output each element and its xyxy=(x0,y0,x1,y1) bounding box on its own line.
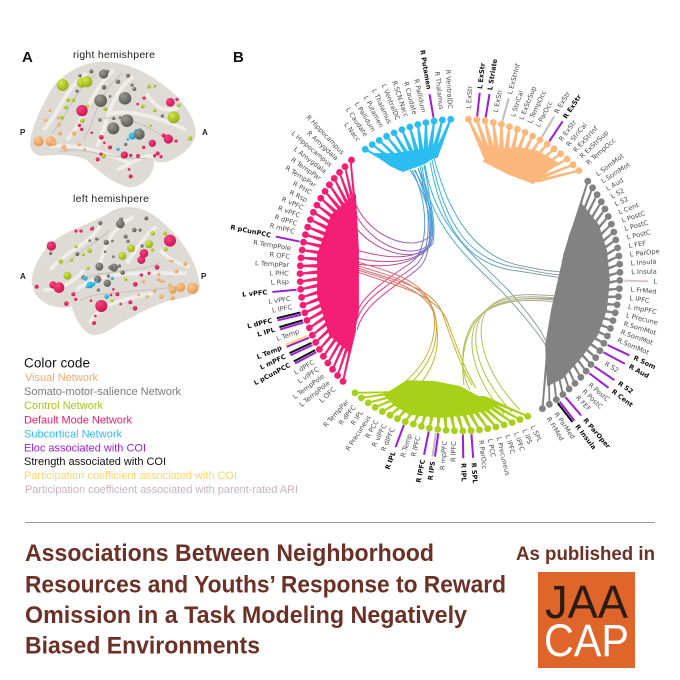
labels: subcortical network: L Caudate xyxy=(344,106,369,138)
labels: control network, right side of axis: L SPL xyxy=(529,424,544,444)
labels: somato-motor network: R FrMed xyxy=(545,416,566,442)
labels: default mode network: L Temp xyxy=(275,328,300,343)
labels: somato-motor network: R FEF xyxy=(574,394,593,413)
labels: control network, left side of axis: R dlPFC xyxy=(379,426,397,452)
labels: default mode network: R vPFC xyxy=(277,204,302,220)
labels: default mode network: L vPFC xyxy=(268,295,292,306)
subcortical network nodes xyxy=(362,116,454,153)
labels: somato-motor network: L SomMot xyxy=(600,160,632,185)
labels: somato-motor network: R Insula xyxy=(573,423,598,451)
labels: control network, left side of axis: R TempPar xyxy=(322,398,351,429)
labels: subcortical network: R Pallidum xyxy=(412,78,427,113)
labels: subcortical network: R.SCN.Nacc xyxy=(390,80,410,119)
labels: control network, right side of axis: R ParOcc xyxy=(477,440,489,470)
labels: control network, left side of axis: R IPL xyxy=(383,450,398,471)
labels: control network, left side of axis: R lPFC xyxy=(449,441,458,462)
labels: subcortical network: L Thalamus xyxy=(370,88,393,125)
visual network bundle xyxy=(465,116,582,183)
labels: somato-motor network: L PostC xyxy=(623,219,650,233)
legend: color code: Participation coefficient associated with parent-rated ARI xyxy=(25,484,298,496)
labels: default mode network: L IPL xyxy=(256,326,277,339)
labels: visual network: L ExStr xyxy=(465,85,474,109)
labels: subcortical network: R Putamen xyxy=(418,49,433,90)
labels: visual network: R ExStr xyxy=(557,118,578,143)
labels: default mode network: R Rsp xyxy=(288,189,309,204)
left hemisphere control nodes xyxy=(58,231,168,302)
labels: control network, left side of axis: R mpPFC xyxy=(438,440,449,470)
labels: somato-motor network: L lPFC xyxy=(629,294,651,305)
panel A heading: left hemisphere: left hemishpere xyxy=(73,193,149,205)
labels: control network, left side of axis: R PCC xyxy=(364,418,381,440)
legend: color code: Visual Network xyxy=(25,372,98,384)
labels: default mode network: R PHC xyxy=(291,180,313,197)
labels: somato-motor network: R S2 xyxy=(616,380,635,396)
labels: default mode network: R dPFC xyxy=(273,213,299,228)
labels: control network, right side of axis: L IPS xyxy=(520,428,534,445)
labels: visual network: R ExStr xyxy=(561,93,584,120)
right hemisphere somato-motor nodes xyxy=(75,69,164,146)
labels: control network, left side of axis: R IPS xyxy=(426,461,437,481)
labels: visual network: L ExStrSup xyxy=(518,85,538,121)
labels: somato-motor network: L mpPFC xyxy=(627,303,658,316)
labels: somato-motor network: L PostC xyxy=(621,209,647,225)
labels: visual network: R TempOcc xyxy=(585,136,618,167)
labels: default mode network: L lPFC xyxy=(271,303,293,315)
legend: color code: Participation coefficient associated with COI xyxy=(24,470,237,482)
labels: default mode network: L pCunPCC xyxy=(252,361,292,387)
links: subcortical to somato-motor xyxy=(422,158,566,348)
labels: subcortical network: R Thalamus xyxy=(433,71,445,111)
labels: somato-motor network: L Insula xyxy=(631,268,657,276)
brain: right hemisphere xyxy=(30,62,196,187)
orientation label A right hemisphere: A xyxy=(202,128,208,137)
labels: somato-motor network xyxy=(545,152,660,451)
labels: somato-motor network: L ParOpe xyxy=(629,247,660,259)
labels: control network, right side of axis: R SPL xyxy=(469,462,479,485)
legend: color code: Somato-motor-salience Network xyxy=(24,386,182,398)
divider rule xyxy=(25,522,655,523)
labels: somato-motor network: R Som xyxy=(632,354,657,371)
left hemisphere somato-motor nodes xyxy=(49,216,148,292)
published-in caption: As published in xyxy=(516,543,655,565)
labels: somato-motor network: L Insula xyxy=(630,258,657,267)
labels: default mode network: L TempPole xyxy=(291,373,326,401)
legend: color code: Eloc associated with COI xyxy=(24,442,146,454)
labels: visual network: L StriCal xyxy=(509,90,525,118)
subcortical network bundle xyxy=(362,116,454,171)
JAACAP journal logo: CAP xyxy=(544,615,629,666)
labels: control network, right side of axis xyxy=(459,424,544,485)
labels: default mode network: L OFC xyxy=(318,385,338,404)
labels: somato-motor network: R PostC xyxy=(587,381,611,404)
labels: subcortical network: R VentralDC xyxy=(444,70,454,109)
labels: somato-motor network: R S2 xyxy=(603,360,620,374)
labels: default mode network: L TempPole xyxy=(298,379,332,409)
labels: somato-motor network: L Precune xyxy=(625,311,659,327)
labels: default mode network: R vPFC xyxy=(280,195,305,212)
legend: color code: Default Mode Network xyxy=(24,414,132,426)
labels: somato-motor network: L FEF xyxy=(628,239,647,250)
labels: default mode network: L dPFC xyxy=(246,317,273,330)
article title xyxy=(25,540,506,660)
legend: color code xyxy=(24,356,298,496)
labels: somato-motor network: L PostC xyxy=(626,228,652,241)
panel label A: A xyxy=(22,49,33,66)
labels: default mode network: R OFC xyxy=(269,251,291,261)
default mode network nodes xyxy=(297,157,355,385)
legend: color code: Subcortical Network xyxy=(24,428,122,440)
labels: control network, right side of axis: L PCC xyxy=(486,438,497,458)
chord diagram: association bars and node labels xyxy=(230,49,660,485)
links: control to somato-motor xyxy=(463,295,558,414)
left hemisphere visual nodes xyxy=(137,259,198,300)
left hemisphere default mode nodes xyxy=(35,227,176,325)
labels: default mode network: R TempPar xyxy=(289,156,323,182)
labels: control network, left side of axis: R dPFC xyxy=(337,403,358,427)
labels: visual network xyxy=(465,58,618,167)
labels: somato-motor network: R Aud xyxy=(627,363,651,380)
labels: default mode network: R Amygdala xyxy=(305,129,340,162)
labels: somato-motor network: L Cent xyxy=(617,201,641,216)
orientation label P right hemisphere: P xyxy=(20,128,26,137)
somato-motor network bundle xyxy=(539,178,623,412)
right hemisphere default mode nodes xyxy=(76,96,179,178)
labels: control network, left side of axis: R lPFC xyxy=(415,459,427,483)
labels: subcortical network: R Caudate xyxy=(402,81,419,115)
links: default mode to subcortical xyxy=(356,165,434,330)
labels: visual network: L ExStrInf xyxy=(506,62,522,95)
article title: Associations Between Neighborhood xyxy=(25,540,434,567)
labels: control network, left side of axis: R Precuneus xyxy=(344,414,373,452)
labels: somato-motor network: R.SomMot xyxy=(616,336,651,357)
labels: control network, right side of axis: R IPL xyxy=(459,463,468,483)
labels: default mode network: L PHC xyxy=(269,269,289,277)
right hemisphere visual nodes xyxy=(34,109,86,152)
labels: subcortical network: L Pallidum xyxy=(353,101,377,133)
control network nodes xyxy=(352,389,531,434)
orientation label A left hemisphere: A xyxy=(20,272,26,281)
chord diagram: between-network links xyxy=(356,158,566,414)
links: default mode to control xyxy=(358,262,476,388)
labels: control network, left side of axis: R lPFC xyxy=(410,435,423,457)
labels: subcortical network xyxy=(342,49,454,143)
brain: left hemisphere xyxy=(32,207,200,335)
legend: color code: Strength associated with COI xyxy=(24,456,166,468)
labels: default mode network: L vlPFC xyxy=(296,365,321,385)
right hemisphere subcortical nodes xyxy=(116,128,141,151)
labels: control network, right side of axis: L lPFC xyxy=(512,431,526,453)
default mode network bundle xyxy=(297,157,358,385)
labels: somato-motor network: L xyxy=(653,278,658,286)
labels: default mode network: L mPFC xyxy=(259,353,287,372)
labels: visual network: R StriCal xyxy=(565,121,589,148)
labels: control network, left side of axis: R IPL xyxy=(349,409,365,427)
labels: default mode network: L dPFC xyxy=(292,358,316,377)
labels: somato-motor network: R PostC xyxy=(580,388,605,411)
labels: visual network: R ExStrInf xyxy=(572,124,600,154)
legend: color code: Control Network xyxy=(24,400,104,412)
labels: visual network: L TempOcc xyxy=(526,89,548,125)
labels: somato-motor network: R ParMed xyxy=(552,411,577,441)
right hemisphere control nodes xyxy=(57,76,192,158)
article title: Omission in a Task Modeling Negatively xyxy=(25,602,468,629)
labels: default mode network: L vPFC xyxy=(242,288,268,299)
labels: control network, right side of axis: L lPFC xyxy=(503,434,517,455)
labels: default mode network xyxy=(230,114,346,409)
labels: default mode network: R TempPar xyxy=(284,164,318,189)
labels: default mode network: R pCunPCC xyxy=(230,223,272,239)
labels: subcortical network: L VentralDC xyxy=(380,83,402,122)
labels: control network, left side of axis: R vlPFC xyxy=(370,423,389,448)
labels: somato-motor network: L Aud xyxy=(605,176,625,193)
labels: default mode network: L Temp xyxy=(256,344,283,361)
panel label B: B xyxy=(233,49,244,66)
labels: visual network: L ParOcc xyxy=(534,99,555,128)
left hemisphere subcortical nodes xyxy=(83,276,114,299)
labels: visual network: R ExStrSup xyxy=(578,129,610,160)
labels: somato-motor network: R.SomMot xyxy=(623,320,658,337)
labels: visual network: L ExStr xyxy=(476,62,487,89)
JAACAP journal logo xyxy=(538,572,635,668)
labels: somato-motor network: R ParOper xyxy=(581,417,613,451)
labels: control network, right side of axis: L Precuneus xyxy=(495,436,512,477)
labels: visual network: L ExStr xyxy=(492,89,505,113)
labels: default mode network: L Amygdala xyxy=(292,145,328,175)
labels: somato-motor network: L S2 xyxy=(613,195,630,208)
somato-motor network nodes xyxy=(539,178,623,412)
association bars xyxy=(272,93,648,458)
labels: somato-motor network: L S2 xyxy=(609,187,626,200)
orientation label P left hemisphere: P xyxy=(201,272,207,281)
labels: subcortical network: L Putamen xyxy=(362,95,385,129)
JAACAP journal logo: JAA xyxy=(545,576,628,628)
visual network nodes xyxy=(465,116,582,174)
control network bundle xyxy=(352,381,531,434)
labels: subcortical network: L Nacc xyxy=(342,121,362,143)
labels: default mode network: R TempPole xyxy=(252,239,292,252)
article title: Resources and Youths’ Response to Reward xyxy=(25,572,506,598)
labels: somato-motor network: R Cent xyxy=(610,388,635,409)
labels: default mode network: L Hippocampus xyxy=(290,130,334,169)
labels: somato-motor network: L FrMed xyxy=(630,286,657,296)
labels: visual network: R ExStr xyxy=(553,90,572,115)
labels: visual network: L Striate xyxy=(486,58,499,91)
labels: control network, left side of axis: R Temp xyxy=(399,433,414,458)
legend: color code: Color code xyxy=(24,356,90,370)
labels: somato-motor network: R.SomMot xyxy=(619,328,654,347)
labels: somato-motor network: L SomMot xyxy=(594,152,626,178)
labels: default mode network: L TempPar xyxy=(255,259,290,269)
labels: control network, left side of axis xyxy=(322,398,458,483)
article title: Biased Environments xyxy=(25,632,260,660)
labels: default mode network: L Rsp xyxy=(271,278,289,287)
labels: default mode network: R mPFC xyxy=(269,222,296,236)
labels: default mode network: R Hippocampus xyxy=(304,114,346,157)
panel A heading: right hemisphere: right hemishpere xyxy=(73,49,155,61)
